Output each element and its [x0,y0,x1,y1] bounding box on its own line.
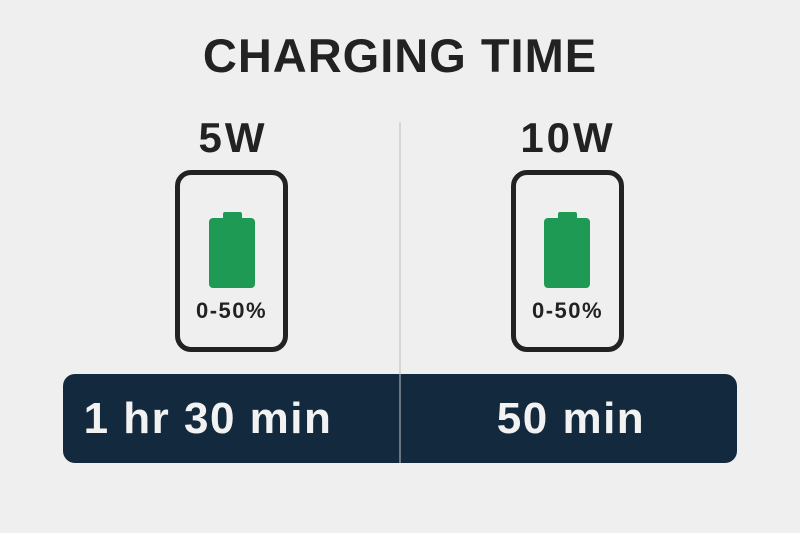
heading: 5W: 5W [198,114,268,161]
icon: phone 5W [175,170,288,352]
icon: phone 10W [511,170,624,352]
divider [399,122,401,463]
label: 0-50% left: 0-50% [196,298,267,323]
time: 10W: 50 min [497,394,645,443]
bar divider [399,374,401,463]
label: 0-50% right: 0-50% [532,298,603,323]
icon: battery 5W [209,212,255,288]
title: CHARGING TIME [203,29,597,82]
heading: 10W: 10W [520,114,616,161]
bottom bar [63,374,737,463]
icon: battery 10W [544,212,590,288]
time: 5W: 1 hr 30 min [84,394,332,443]
